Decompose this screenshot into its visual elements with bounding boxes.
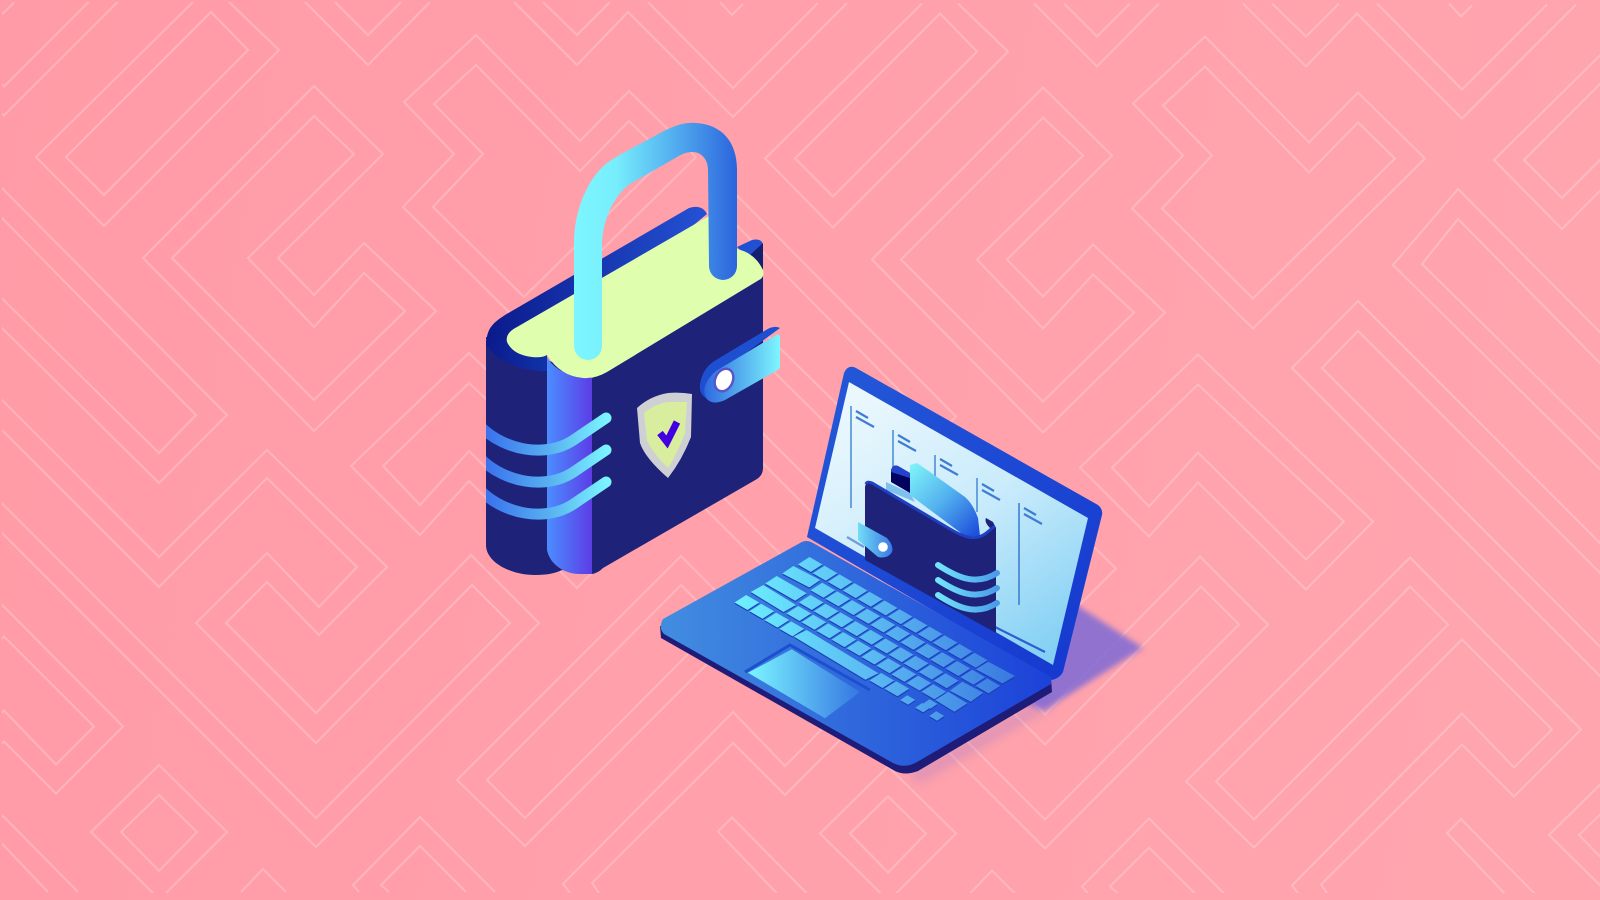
book spine (547, 357, 592, 574)
lock top face (507, 216, 764, 378)
shield icon (637, 393, 692, 478)
floor shadow of laptop (910, 602, 1143, 782)
laptop screen (815, 382, 1088, 665)
screen text dashes (847, 411, 1045, 652)
lock body (486, 270, 763, 575)
shackle (574, 123, 737, 360)
wallet on screen (858, 463, 997, 633)
trackpad groove (745, 645, 870, 690)
screen columns (851, 406, 1019, 605)
bands (482, 418, 606, 514)
trackpad (748, 649, 860, 718)
laptop base side (660, 626, 1052, 774)
keyboard key shadows (734, 558, 1015, 722)
illustration: padlock wallet (482, 123, 780, 575)
clasp strap (700, 327, 780, 403)
back right strip (737, 240, 763, 275)
spine cap (486, 337, 547, 371)
illustration: laptop (660, 367, 1102, 774)
laptop lid (807, 367, 1102, 680)
keyboard keys (734, 557, 1015, 721)
laptop base top (661, 541, 1051, 766)
back cover strip (486, 207, 707, 350)
